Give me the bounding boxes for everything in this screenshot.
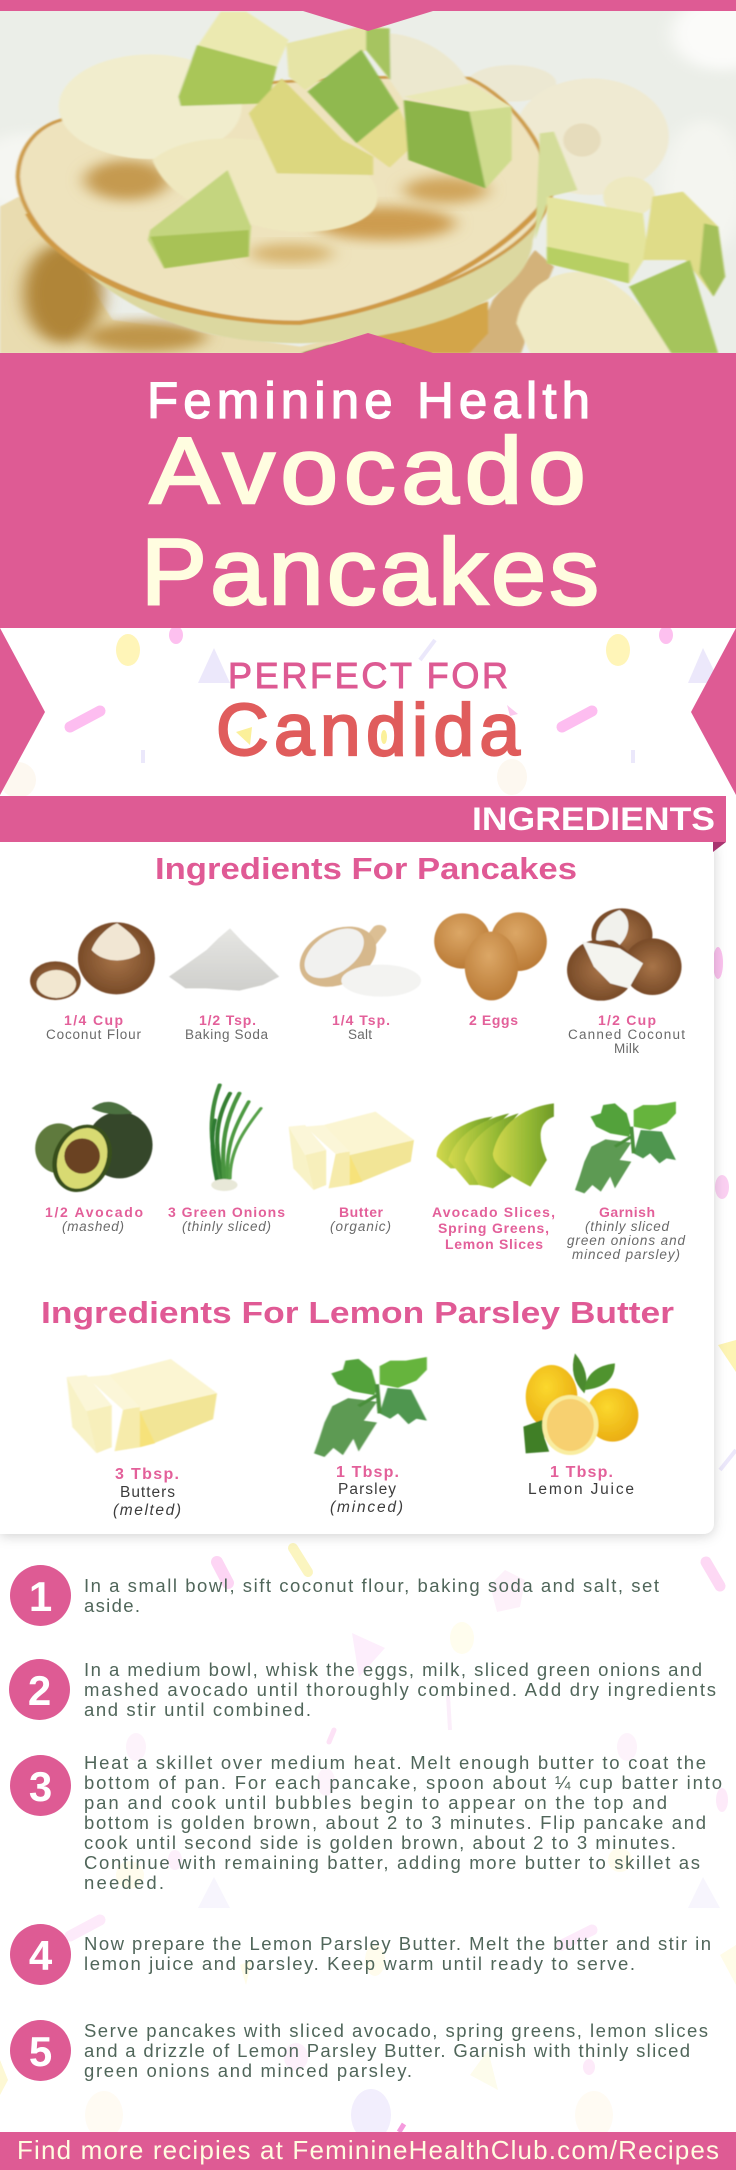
label: avocado slices, spring greens, lemon slices: Lemon Slices	[445, 1236, 543, 1252]
icon: butter block	[67, 1359, 217, 1453]
label: green onions: 3 Green Onions	[168, 1204, 285, 1220]
icon: garnish parsley	[575, 1102, 676, 1193]
label: green onions: (thinly sliced)	[182, 1219, 271, 1234]
icon: baking soda	[169, 928, 279, 991]
label: salt	[332, 1012, 390, 1042]
label: avocado: 1/2 Avocado	[45, 1204, 143, 1220]
background confetti	[0, 626, 736, 2141]
ingredients card	[0, 842, 714, 1534]
hero photo: avocado and banana pancakes	[0, 0, 736, 353]
subtitle: Candida: Candida	[216, 690, 520, 771]
step 5	[10, 2020, 708, 2081]
icon: green onions	[211, 1085, 261, 1191]
step 3: 3	[29, 1763, 52, 1810]
icon: avocado slices	[437, 1103, 554, 1188]
step 3: Continue with remaining batter, adding more butter to skillet as	[84, 1852, 700, 1873]
icon: salt	[284, 916, 421, 997]
label: salt: 1/4 Tsp.	[332, 1012, 390, 1028]
label: canned coconut milk: Canned Coconut	[568, 1027, 685, 1042]
label: canned coconut milk: Milk	[614, 1041, 639, 1056]
label: baking soda: 1/2 Tsp.	[199, 1012, 256, 1028]
step 2: 2	[28, 1667, 51, 1714]
label: garnish	[567, 1204, 685, 1262]
label: parsley: Parsley	[338, 1481, 396, 1498]
label: green onions	[168, 1204, 285, 1234]
icon: coconut flour	[30, 922, 155, 1000]
label: garnish: (thinly sliced	[585, 1219, 669, 1234]
label: garnish: Garnish	[599, 1204, 655, 1220]
step 1: In a small bowl, sift coconut flour, baking soda and salt, set	[84, 1575, 659, 1596]
ribbon right tail	[691, 628, 736, 795]
label: parsley: 1 Tbsp.	[336, 1464, 399, 1481]
step 3: bottom is golden brown, about 2 to 3 minutes. Flip pancake and	[84, 1812, 706, 1833]
title line: Feminine Health: Feminine Health	[147, 372, 590, 429]
label: butters: 3 Tbsp.	[115, 1466, 179, 1483]
step 3	[10, 1752, 722, 1893]
label: butters: (melted)	[113, 1502, 181, 1519]
label: garnish: green onions and	[567, 1233, 685, 1248]
title line: Avocado: Avocado	[150, 418, 586, 523]
step 5: 5	[29, 2028, 52, 2075]
icon: avocado	[35, 1102, 153, 1195]
icon: parsley	[314, 1357, 427, 1457]
label: eggs: 2 Eggs	[469, 1012, 518, 1028]
label: baking soda: Baking Soda	[185, 1027, 268, 1042]
label: butters	[113, 1466, 181, 1519]
subtitle: perfect for: PERFECT FOR	[228, 655, 508, 696]
label: coconut flour	[46, 1012, 142, 1042]
heading: ingredients for lemon parsley butter: Ingredients For Lemon Parsley Butter	[41, 1295, 674, 1330]
label: butters: Butters	[120, 1484, 175, 1501]
ribbon left tail	[0, 628, 45, 795]
icon: lemons	[523, 1353, 638, 1455]
step 3: needed.	[84, 1872, 164, 1893]
label: canned coconut milk: 1/2 Cup	[598, 1012, 656, 1028]
footer band: Find more recipies at FeminineHealthClub.com/Recipes	[17, 2135, 719, 2165]
step 2: mashed avocado until thoroughly combined. Add dry ingredients	[84, 1679, 716, 1700]
step 2: and stir until combined.	[84, 1699, 311, 1720]
label: canned coconut milk	[568, 1012, 685, 1056]
label: coconut flour: Coconut Flour	[46, 1027, 142, 1042]
step 2	[9, 1659, 716, 1720]
label: lemon juice: 1 Tbsp.	[550, 1464, 613, 1481]
label: parsley	[330, 1464, 403, 1516]
label: avocado: (mashed)	[62, 1219, 124, 1234]
label: parsley: (minced)	[330, 1499, 403, 1516]
step 3: Heat a skillet over medium heat. Melt enough butter to coat the	[84, 1752, 706, 1773]
step 3: bottom of pan. For each pancake, spoon about ¼ cup batter into	[84, 1772, 722, 1793]
label: avocado slices, spring greens, lemon slices: Spring Greens,	[438, 1220, 549, 1236]
heading: ingredients for pancakes: Ingredients For Pancakes	[155, 851, 577, 886]
label: avocado	[45, 1204, 143, 1234]
step 4: Now prepare the Lemon Parsley Butter. Melt the butter and stir in	[84, 1933, 711, 1954]
step 3: cook until second side is golden brown, about 2 to 3 minutes.	[84, 1832, 676, 1853]
ingredients banner	[0, 796, 726, 852]
step 1: 1	[29, 1573, 52, 1620]
step 3: pan and cook until bubbles begin to appear on the top and	[84, 1792, 667, 1813]
label: baking soda	[185, 1012, 268, 1042]
label: avocado slices, spring greens, lemon slices: Avocado Slices,	[432, 1204, 555, 1220]
label: butter	[330, 1204, 391, 1234]
label: lemon juice: Lemon Juice	[528, 1481, 634, 1498]
label: coconut flour: 1/4 Cup	[64, 1012, 123, 1028]
title panel	[0, 333, 736, 628]
step 1	[10, 1565, 659, 1626]
icon: canned coconut milk	[567, 908, 682, 1001]
label: butter: (organic)	[330, 1219, 391, 1234]
step 4: 4	[29, 1932, 53, 1979]
step 5: Serve pancakes with sliced avocado, spring greens, lemon slices	[84, 2020, 708, 2041]
step 4: lemon juice and parsley. Keep warm until ready to serve.	[84, 1953, 635, 1974]
label: avocado slices, spring greens, lemon slices	[432, 1204, 555, 1252]
label: salt: Salt	[348, 1027, 372, 1042]
step 1: aside.	[84, 1595, 140, 1616]
step 4	[10, 1924, 711, 1985]
icon: butter	[289, 1112, 414, 1190]
top pink band with chevron	[0, 0, 736, 31]
title line: Pancakes: Pancakes	[141, 520, 599, 624]
label: garnish: minced parsley)	[572, 1247, 680, 1262]
step 2: In a medium bowl, whisk the eggs, milk, sliced green onions and	[84, 1659, 702, 1680]
ingredients banner: INGREDIENTS	[472, 801, 715, 837]
label: lemon juice	[528, 1464, 634, 1498]
step 5: and a drizzle of Lemon Parsley Butter. Garnish with thinly sliced	[84, 2040, 690, 2061]
label: butter: Butter	[339, 1204, 384, 1220]
icon: eggs	[434, 912, 547, 1000]
step 5: green onions and minced parsley.	[84, 2060, 412, 2081]
